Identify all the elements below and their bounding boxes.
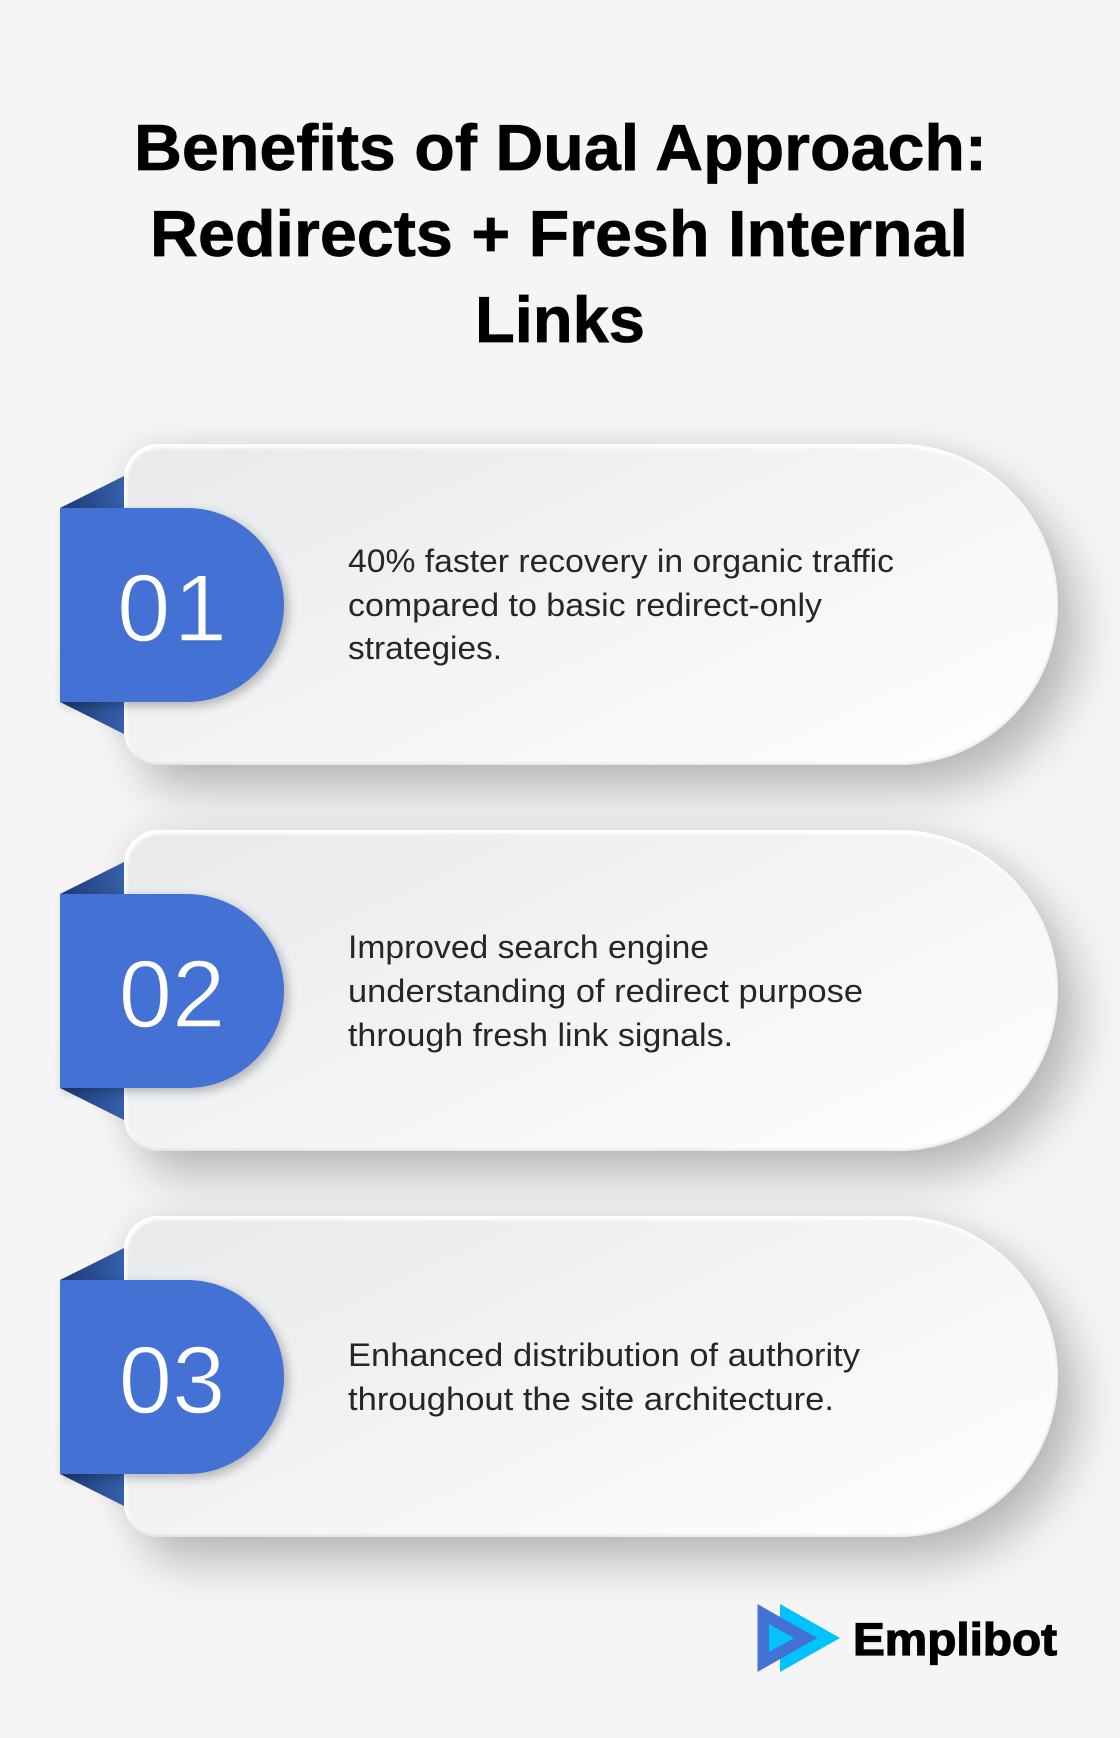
badge number and description (119, 929, 863, 1053)
number badge (60, 894, 284, 1088)
wordmark: Emplibot (853, 1614, 1057, 1665)
badge number and description: through fresh link signals. (348, 1017, 733, 1053)
panel: benefit 02 (58, 820, 1101, 1200)
badge number and description: 40% faster recovery in organic traffic (348, 543, 894, 579)
badge number and description: 02 (119, 941, 225, 1048)
badge number and description: throughout the site architecture. (348, 1381, 834, 1417)
panel: benefit 03 (58, 1206, 1101, 1586)
badge number and description (117, 543, 894, 666)
badge number and description: compared to basic redirect-only (348, 587, 823, 623)
card body (124, 1216, 1058, 1537)
icon: play triangles (758, 1604, 840, 1672)
badge number and description: Improved search engine (348, 929, 709, 965)
number badge (60, 508, 284, 702)
badge number and description (119, 1327, 861, 1434)
title: Benefits of Dual Approach: (134, 111, 987, 184)
card body (124, 444, 1058, 765)
title: Redirects + Fresh Internal (150, 197, 968, 270)
title (134, 111, 987, 356)
ribbon folds (60, 1248, 124, 1506)
ribbon folds (60, 862, 124, 1120)
badge number and description: understanding of redirect purpose (348, 973, 863, 1009)
ribbon folds (60, 476, 124, 734)
badge number and description: 03 (119, 1327, 225, 1434)
title: Links (475, 283, 645, 356)
badge number and description: Enhanced distribution of authority (348, 1337, 861, 1373)
badge number and description: strategies. (348, 630, 502, 666)
card body (124, 830, 1058, 1151)
logo: Emplibot (758, 1604, 1058, 1672)
number badge (60, 1280, 284, 1474)
badge number and description: 01 (117, 555, 227, 662)
panel: benefit 01 (58, 434, 1101, 814)
